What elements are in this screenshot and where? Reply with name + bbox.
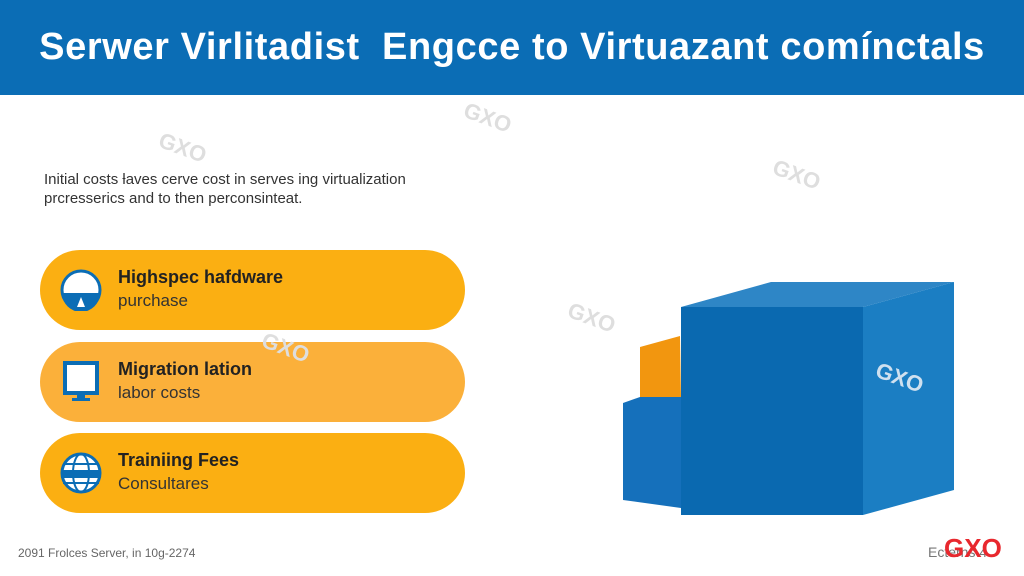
panel: training: Trainiing Fees [118, 450, 239, 470]
text: GXO [872, 357, 927, 398]
panel: hardware [40, 250, 465, 330]
text: GXO [460, 97, 515, 138]
logo: GXO [944, 533, 1002, 563]
watermarks: GXO [155, 127, 210, 168]
panel: training: Consultares [118, 474, 209, 493]
panel: hardware: Highspec hafdware [118, 267, 283, 287]
icon: globe [60, 452, 102, 494]
text: GXO [258, 327, 313, 368]
panel: migration: Migration lation [118, 359, 252, 379]
header: Serwer Virlitadist Engcce to Virtuazant comínctals [39, 26, 985, 68]
panel: migration [40, 342, 465, 422]
footer text: 2091 Frolces Server, in 10g-2274 [18, 546, 195, 560]
panel: hardware: purchase [118, 291, 188, 310]
intro text [44, 171, 406, 207]
panel: training [40, 433, 465, 513]
icon: monitor [63, 361, 99, 401]
icon: gauge [60, 270, 102, 311]
footer right: Ecterns 4 [928, 544, 987, 560]
intro text: Initial costs ƚaves cerve cost in serves ing virtualization [44, 171, 406, 188]
text: GXO [564, 297, 619, 338]
panel: migration: labor costs [118, 383, 200, 402]
intro text: prcresserics and to then perconsinteat. [44, 190, 302, 207]
text: GXO [769, 154, 824, 195]
header [0, 0, 1024, 95]
